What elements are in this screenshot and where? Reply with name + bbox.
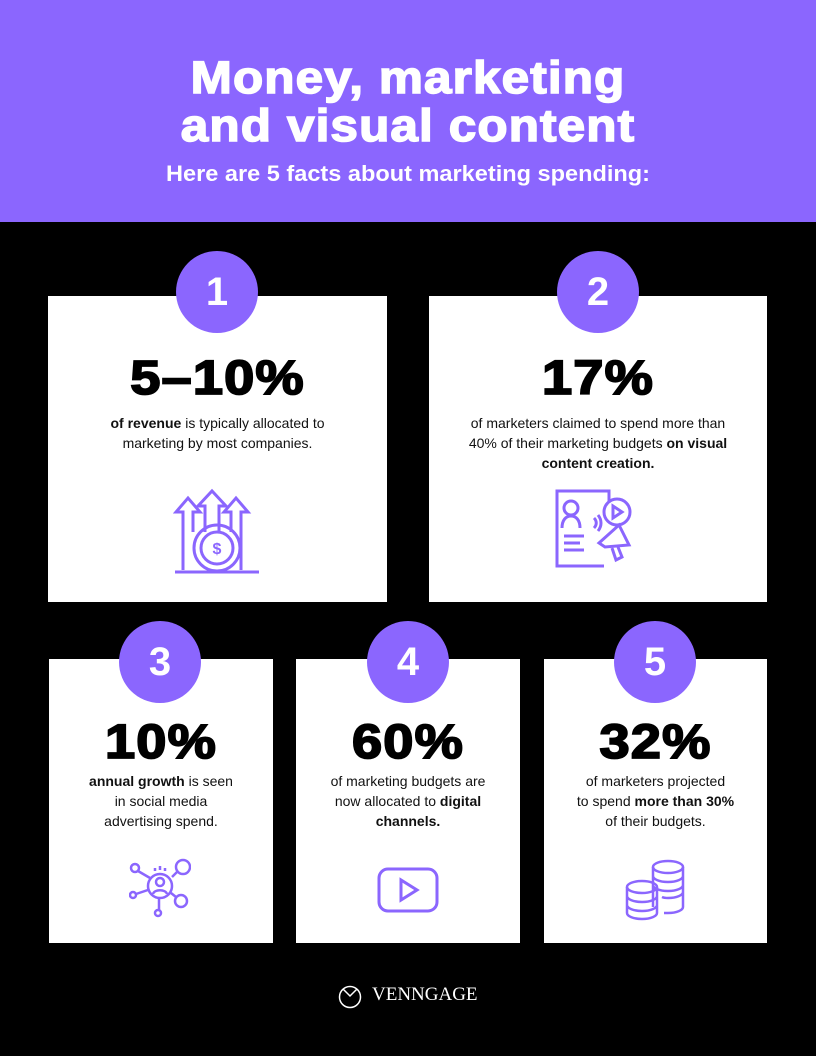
panel: fact 5 (544, 659, 767, 943)
subtitle: Here are 5 facts about marketing spending: (166, 161, 650, 186)
badge 2: 2 (587, 270, 609, 314)
panel: fact 3 (49, 659, 273, 943)
text: marketing by most companies. (123, 435, 312, 451)
text (89, 773, 233, 829)
panel: fact 2 (429, 296, 767, 602)
brand: VENNGAGE (372, 984, 478, 1005)
badge 1: 1 (206, 270, 228, 314)
text: of revenue is typically allocated to (110, 415, 324, 431)
stat: 17% (542, 352, 654, 405)
text (469, 415, 727, 471)
text: now allocated to digital (335, 793, 481, 809)
text: of marketers claimed to spend more than (471, 415, 725, 431)
text: content creation. (542, 455, 654, 471)
stat: 5–10% (130, 352, 305, 405)
text: of marketers projected (586, 773, 725, 789)
text (110, 415, 324, 451)
badge 1 (176, 251, 258, 333)
title: and visual content (181, 100, 635, 151)
text: to spend more than 30% (577, 793, 734, 809)
badge 3 (119, 621, 201, 703)
panel: fact 1 (48, 296, 387, 602)
icon: coins (626, 860, 684, 920)
stat: 60% (352, 716, 464, 769)
footer logo (338, 984, 478, 1008)
stat: 10% (105, 716, 217, 769)
badge 5 (614, 621, 696, 703)
badge 2 (557, 251, 639, 333)
icon: logo (338, 986, 362, 1008)
title: Money, marketing (191, 52, 625, 103)
badge 3: 3 (149, 640, 171, 684)
header (0, 0, 816, 222)
text (577, 773, 734, 829)
title (181, 52, 635, 151)
text: of their budgets. (605, 813, 706, 829)
icon: network (129, 858, 191, 918)
badge 5: 5 (644, 640, 666, 684)
text: of marketing budgets are (331, 773, 485, 789)
text: channels. (376, 813, 440, 829)
icon: content megaphone (556, 490, 632, 568)
text: annual growth is seen (89, 773, 233, 789)
badge 4: 4 (397, 640, 419, 684)
icon: arrows coin: $ (213, 541, 222, 558)
icon: play (378, 868, 438, 912)
text: in social media (115, 793, 207, 809)
icon: arrows coin (173, 488, 259, 574)
badge 4 (367, 621, 449, 703)
stat: 32% (600, 716, 711, 769)
text: 40% of their marketing budgets on visual (469, 435, 727, 451)
text (331, 773, 485, 829)
text: advertising spend. (104, 813, 218, 829)
panel: fact 4 (296, 659, 520, 943)
